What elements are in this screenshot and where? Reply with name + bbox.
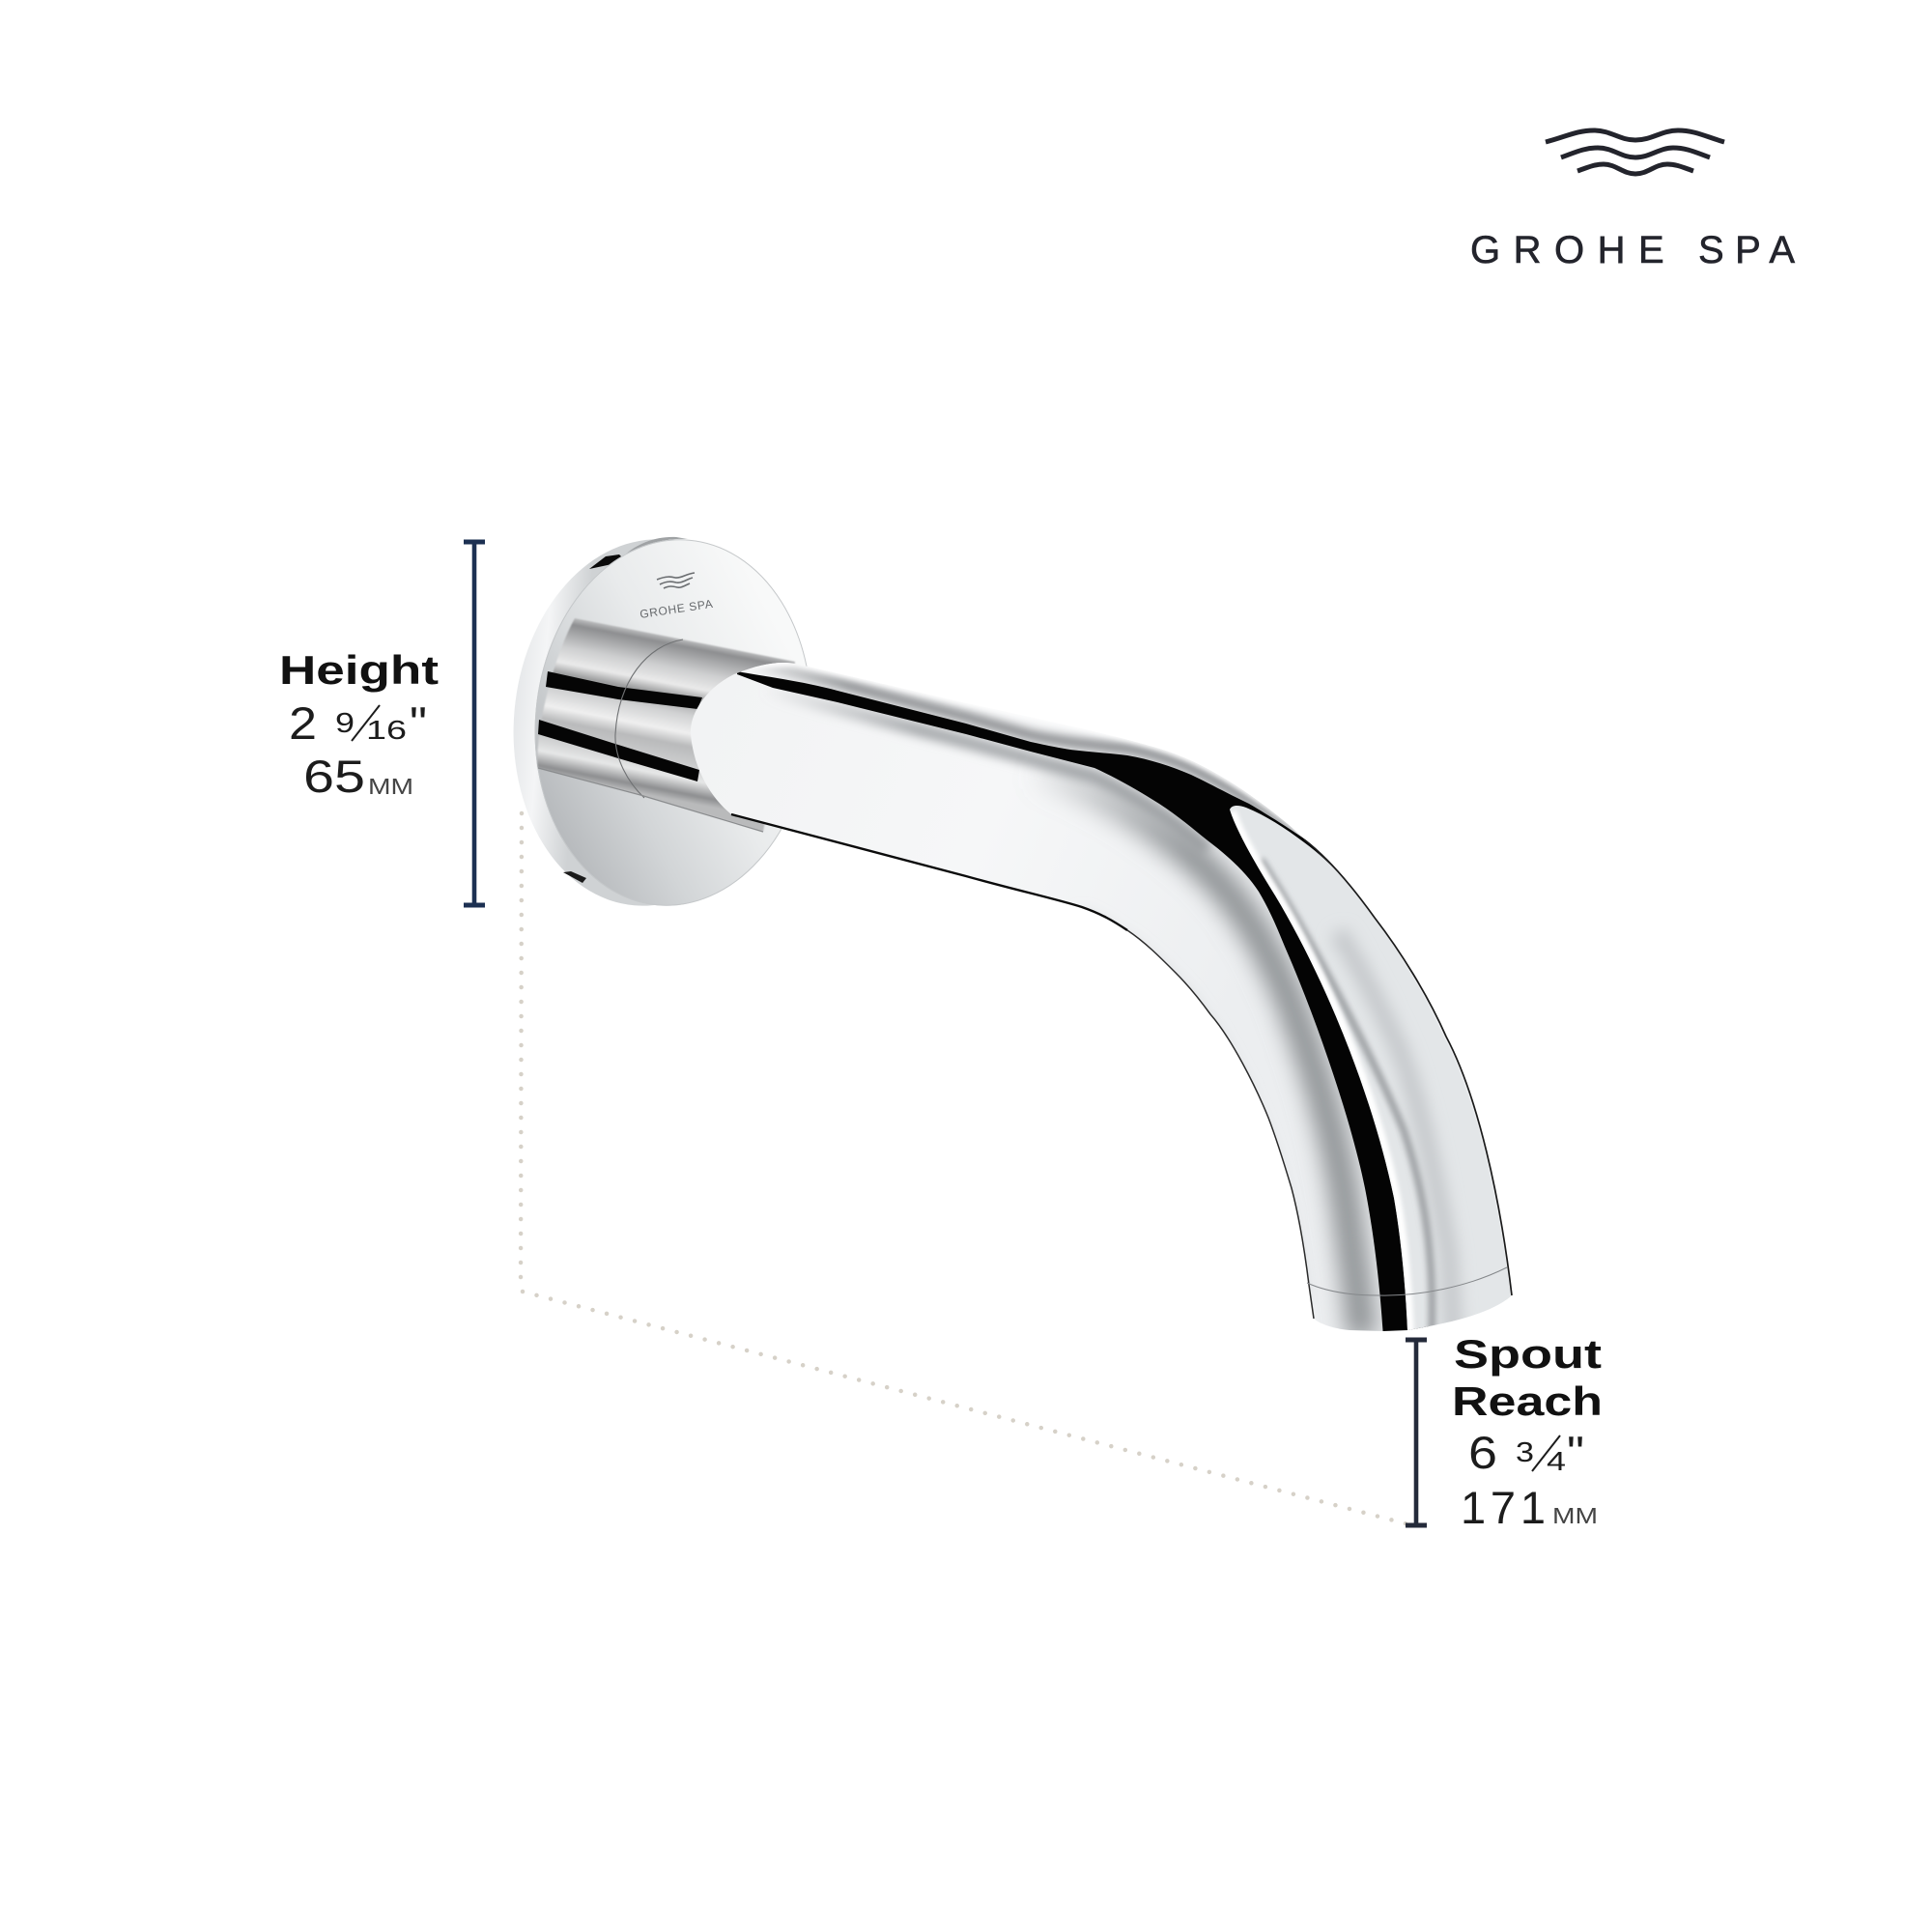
plate engraved logo bbox=[639, 573, 714, 621]
height dimension bracket bbox=[464, 542, 485, 905]
metric value: MM bbox=[368, 774, 413, 799]
plate rim bbox=[498, 527, 802, 918]
spout body bbox=[691, 659, 1512, 1338]
imperial value: 3 bbox=[1516, 1437, 1534, 1468]
metric value: 65 bbox=[303, 751, 365, 802]
imperial value bbox=[1468, 1427, 1584, 1478]
body shading bbox=[734, 659, 1430, 1338]
imperial value: 4 bbox=[1547, 1446, 1566, 1476]
body base bbox=[691, 663, 1512, 1331]
imperial value: 16 bbox=[366, 715, 407, 745]
right lobe highlight bbox=[1230, 806, 1511, 1338]
collar stub bbox=[537, 618, 795, 832]
dotted projection guides bbox=[521, 813, 1408, 1524]
height label bbox=[279, 647, 439, 802]
product: wall-mounted tub spout bbox=[498, 527, 1512, 1338]
spout reach dimension bracket bbox=[1406, 1340, 1427, 1525]
imperial value: " bbox=[1567, 1427, 1584, 1478]
infographic canvas bbox=[282, 128, 1795, 1528]
brand logo: GROHE SPA bbox=[1470, 130, 1806, 271]
heading: Height: Height bbox=[279, 647, 439, 693]
logo wordmark: GROHE bbox=[1470, 229, 1701, 271]
logo wordmark: SPA bbox=[1698, 229, 1806, 271]
metric value bbox=[1461, 1482, 1598, 1533]
metric value bbox=[303, 751, 413, 802]
engraved waves bbox=[657, 573, 695, 588]
metric value: 171 bbox=[1461, 1482, 1546, 1533]
engraved wordmark: GROHE SPA bbox=[639, 597, 714, 621]
spout reach label bbox=[1452, 1331, 1603, 1533]
metric value: MM bbox=[1552, 1503, 1598, 1528]
icon: waves bbox=[1546, 130, 1724, 174]
spout outlines bbox=[731, 814, 1512, 1319]
imperial value: 6 bbox=[1468, 1427, 1497, 1478]
main black reflection band bbox=[737, 671, 1430, 1338]
collar seam bbox=[615, 639, 683, 798]
heading: Spout: Spout bbox=[1454, 1331, 1602, 1377]
plate face bbox=[520, 527, 827, 918]
imperial value bbox=[289, 697, 427, 749]
imperial value: 9 bbox=[335, 708, 355, 739]
imperial value: 2 bbox=[289, 697, 317, 749]
imperial value: " bbox=[410, 697, 427, 749]
reflection stripes bbox=[538, 671, 702, 781]
wall plate bbox=[498, 527, 827, 918]
heading: Reach: Reach bbox=[1452, 1378, 1603, 1424]
